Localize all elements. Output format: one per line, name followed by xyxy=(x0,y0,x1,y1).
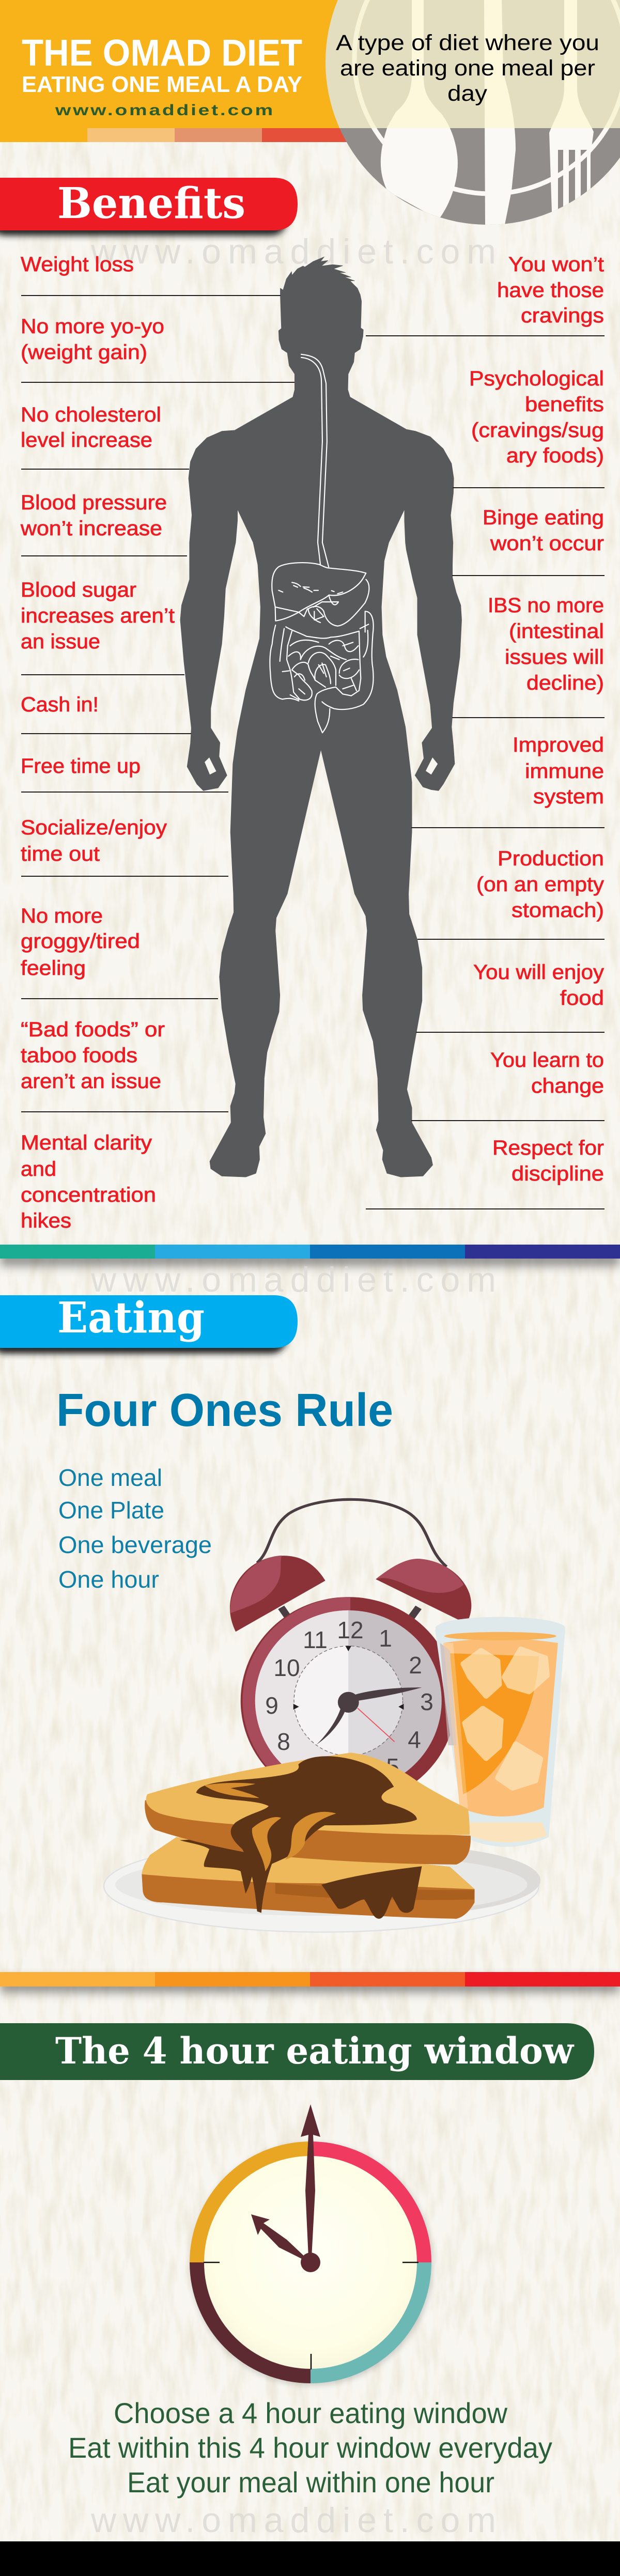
clock numbers: 3 xyxy=(420,1688,433,1715)
website: www.omaddiet.com xyxy=(55,102,273,119)
item: production xyxy=(417,847,605,939)
clock numbers: 4 xyxy=(408,1726,421,1753)
item: IBS: IBS no more xyxy=(488,594,604,617)
item: blood sugar: increases aren’t xyxy=(21,604,175,627)
item: enjoy food: You will enjoy xyxy=(473,961,604,984)
illustration: clock, toast and juice xyxy=(104,1499,565,1932)
esophagus xyxy=(301,354,329,567)
item: production: (on an empty xyxy=(476,873,604,896)
item: free time: Free time up xyxy=(21,755,141,778)
heading: Eating xyxy=(0,1293,298,1354)
item: blood sugar: Blood sugar xyxy=(21,579,136,601)
heading: Benefits: Benefits xyxy=(57,179,245,228)
clock: 4 hour window xyxy=(190,2104,432,2385)
lower chocolate xyxy=(180,1837,422,1919)
item: mental clarity: Mental clarity xyxy=(21,1131,152,1154)
list: four ones: One Plate xyxy=(58,1497,164,1524)
digestive organs xyxy=(270,563,374,733)
item: groggy: feeling xyxy=(21,957,86,980)
plate with cutlery xyxy=(326,0,620,227)
item: cravings: You won’t xyxy=(508,253,604,276)
item: psychological: (cravings/sug xyxy=(471,419,604,442)
item: cravings: cravings xyxy=(521,304,604,327)
item: enjoy food xyxy=(416,961,605,1032)
item: binge eating: won’t occur xyxy=(490,532,604,555)
item: immune: Improved xyxy=(513,734,604,756)
item: enjoy food: food xyxy=(560,987,604,1010)
item: immune: immune xyxy=(525,760,604,783)
clock numbers: 5 xyxy=(386,1753,399,1780)
toast with chocolate xyxy=(142,1752,475,1919)
watermark: www.omaddiet.com xyxy=(90,1260,496,1299)
item: yo-yo xyxy=(21,315,295,382)
watermark: www.omaddiet.com xyxy=(90,2501,496,2540)
item: cholesterol: No cholesterol xyxy=(21,404,161,426)
item: blood pressure: won’t increase xyxy=(20,517,162,540)
item: groggy xyxy=(21,905,218,999)
item: cash in: Cash in! xyxy=(21,693,99,716)
item: cholesterol xyxy=(21,404,189,469)
clock hands xyxy=(316,1687,422,1745)
clock numbers: 12 xyxy=(337,1617,364,1643)
item: discipline: discipline xyxy=(512,1162,604,1185)
item: groggy: No more xyxy=(21,905,103,927)
item: discipline: Respect for xyxy=(492,1137,604,1159)
item: IBS xyxy=(452,594,605,718)
clock numbers: 1 xyxy=(379,1625,392,1652)
heading: Benefits xyxy=(0,178,298,236)
heading: Eating: Eating xyxy=(57,1293,205,1343)
colour swatches xyxy=(87,128,357,142)
definition text: are eating one meal per xyxy=(340,56,595,81)
heading: Four Ones Rule: Four Ones Rule xyxy=(56,1385,393,1436)
benefits left column xyxy=(20,253,295,1232)
plate xyxy=(104,1840,540,1932)
item: blood sugar xyxy=(21,579,184,675)
clock hands xyxy=(251,2104,320,2272)
item: bad foods: “Bad foods” or xyxy=(21,1018,165,1041)
item: mental clarity: hikes xyxy=(21,1209,71,1232)
item: binge eating: Binge eating xyxy=(483,506,604,529)
item: blood pressure: Blood pressure xyxy=(21,491,167,514)
eating window instructions: Eat your meal within one hour xyxy=(127,2466,494,2499)
blue divider bar xyxy=(0,1245,620,1266)
juice glass xyxy=(435,1617,565,1847)
item: bad foods: taboo foods xyxy=(21,1044,137,1067)
definition text xyxy=(336,30,599,106)
clock ring segments xyxy=(190,2142,432,2385)
item: bad foods xyxy=(21,1018,228,1112)
item: bad foods: aren’t an issue xyxy=(21,1070,161,1093)
item: learn to change xyxy=(411,1049,605,1121)
item: groggy: groggy/tired xyxy=(21,930,140,953)
item: learn to change: change xyxy=(531,1075,604,1097)
item: psychological: benefits xyxy=(525,393,604,416)
clock numbers: 2 xyxy=(409,1652,422,1679)
eating window instructions xyxy=(68,2397,552,2499)
item: immune xyxy=(411,734,605,828)
item: psychological: Psychological xyxy=(469,367,604,390)
body silhouette xyxy=(180,257,462,1177)
benefits right column xyxy=(366,253,605,1209)
item: cravings xyxy=(366,253,605,336)
item: production: stomach) xyxy=(512,899,604,922)
tick marks xyxy=(204,2262,419,2369)
item: IBS: decline) xyxy=(526,672,604,694)
item: yo-yo: (weight gain) xyxy=(21,341,147,364)
item: weight loss: Weight loss xyxy=(21,253,134,276)
item: IBS: (intestinal xyxy=(509,620,604,643)
item: socialize: Socialize/enjoy xyxy=(21,816,167,839)
clock numbers: 11 xyxy=(303,1626,328,1653)
item: psychological xyxy=(453,367,605,488)
heading: 4 hour eating window: The 4 hour eating window xyxy=(55,2029,575,2072)
item: mental clarity xyxy=(21,1131,156,1232)
definition text: A type of diet where you xyxy=(336,30,599,55)
clock numbers: 8 xyxy=(277,1728,290,1755)
clock numbers xyxy=(265,1617,433,1780)
definition text: day xyxy=(447,81,488,106)
hand gaps xyxy=(205,757,438,774)
item: blood sugar: an issue xyxy=(21,630,100,653)
item: learn to change: You learn to xyxy=(490,1049,604,1072)
black footer xyxy=(0,2541,620,2576)
item: yo-yo: No more yo-yo xyxy=(21,315,164,338)
alarm clock xyxy=(230,1499,471,1805)
list: four ones: One hour xyxy=(58,1566,159,1593)
item: psychological: ary foods) xyxy=(506,444,604,467)
item: cravings: have those xyxy=(497,279,604,302)
item: cholesterol: level increase xyxy=(21,429,152,452)
list: four ones: One beverage xyxy=(58,1531,212,1558)
item: mental clarity: concentration xyxy=(21,1184,156,1206)
title: THE OMAD DIET xyxy=(22,33,302,74)
item: socialize xyxy=(21,816,228,876)
item: production: Production xyxy=(498,847,604,870)
item: socialize: time out xyxy=(21,843,100,865)
item: discipline xyxy=(366,1137,605,1209)
list: four ones xyxy=(58,1464,212,1593)
list: four ones: One meal xyxy=(58,1464,162,1491)
item: IBS: issues will xyxy=(505,646,604,669)
eating window instructions: Eat within this 4 hour window everyday xyxy=(68,2431,552,2464)
item: binge eating xyxy=(452,506,605,576)
clock numbers: 9 xyxy=(265,1692,278,1719)
orange divider bar xyxy=(0,1972,620,1992)
subtitle: EATING ONE MEAL A DAY xyxy=(22,72,302,97)
item: blood pressure xyxy=(20,491,187,556)
clock numbers: 10 xyxy=(273,1654,300,1681)
header banner xyxy=(0,0,620,227)
watermark: www.omaddiet.com xyxy=(90,232,496,271)
orange title panel xyxy=(0,0,357,142)
heading: 4 hour eating window xyxy=(0,2023,594,2080)
item: immune: system xyxy=(533,785,604,808)
eating window instructions: Choose a 4 hour eating window xyxy=(114,2397,508,2429)
item: mental clarity: and xyxy=(21,1158,56,1181)
